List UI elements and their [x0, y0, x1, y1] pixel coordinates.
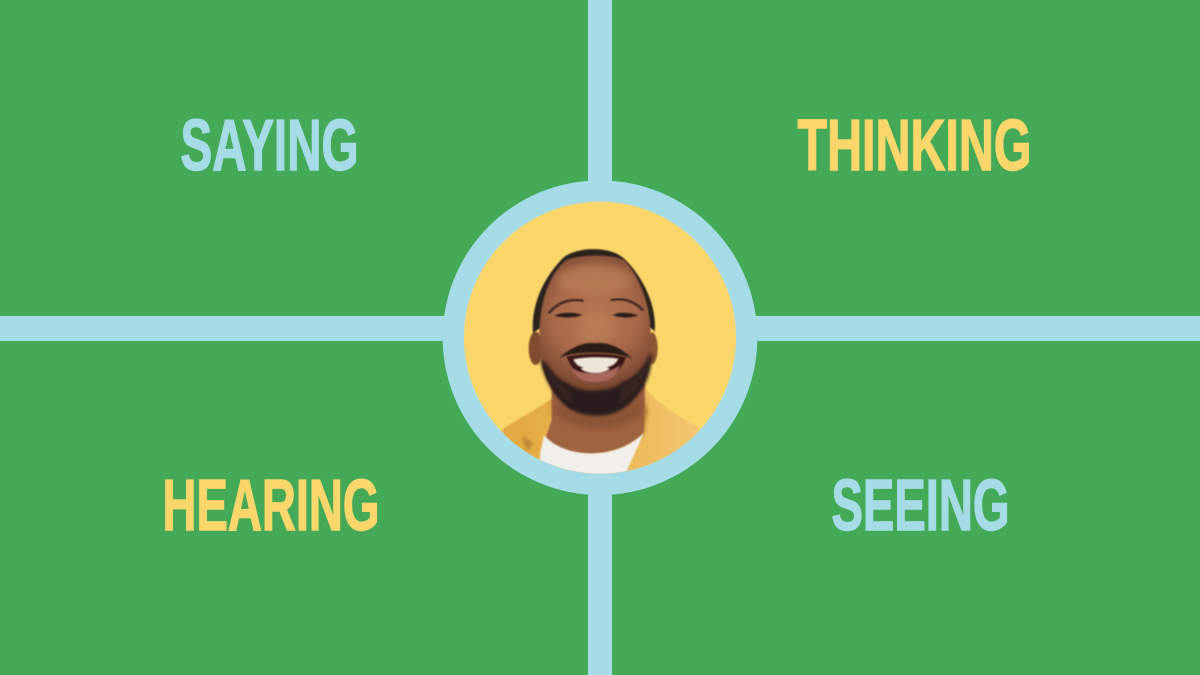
- teeth: [573, 357, 618, 373]
- portrait illustration: [502, 249, 700, 480]
- face: [538, 254, 652, 393]
- label: saying: SAYING: [180, 106, 358, 186]
- shirt: [502, 385, 700, 480]
- moustache: [559, 343, 633, 359]
- eyes: [554, 313, 583, 318]
- nose: [580, 319, 614, 339]
- beard: [540, 352, 652, 416]
- label: thinking: THINKING: [798, 106, 1032, 186]
- center portrait circle: [443, 180, 757, 495]
- mouth: [567, 354, 626, 377]
- white t-shirt: [540, 433, 644, 475]
- forehead highlight: [557, 265, 633, 295]
- ears: [529, 332, 543, 365]
- label: seeing: SEEING: [832, 466, 1010, 546]
- label: hearing: HEARING: [162, 466, 380, 546]
- yellow backdrop: [464, 202, 736, 474]
- neck shadow: [553, 393, 643, 428]
- neck: [545, 383, 645, 454]
- hair: [533, 249, 655, 333]
- beard stubble: [548, 361, 646, 401]
- circle ring: [443, 180, 757, 495]
- eyebrows: [549, 300, 583, 313]
- lower lip: [572, 365, 620, 382]
- shirt collar shadow: [522, 402, 650, 451]
